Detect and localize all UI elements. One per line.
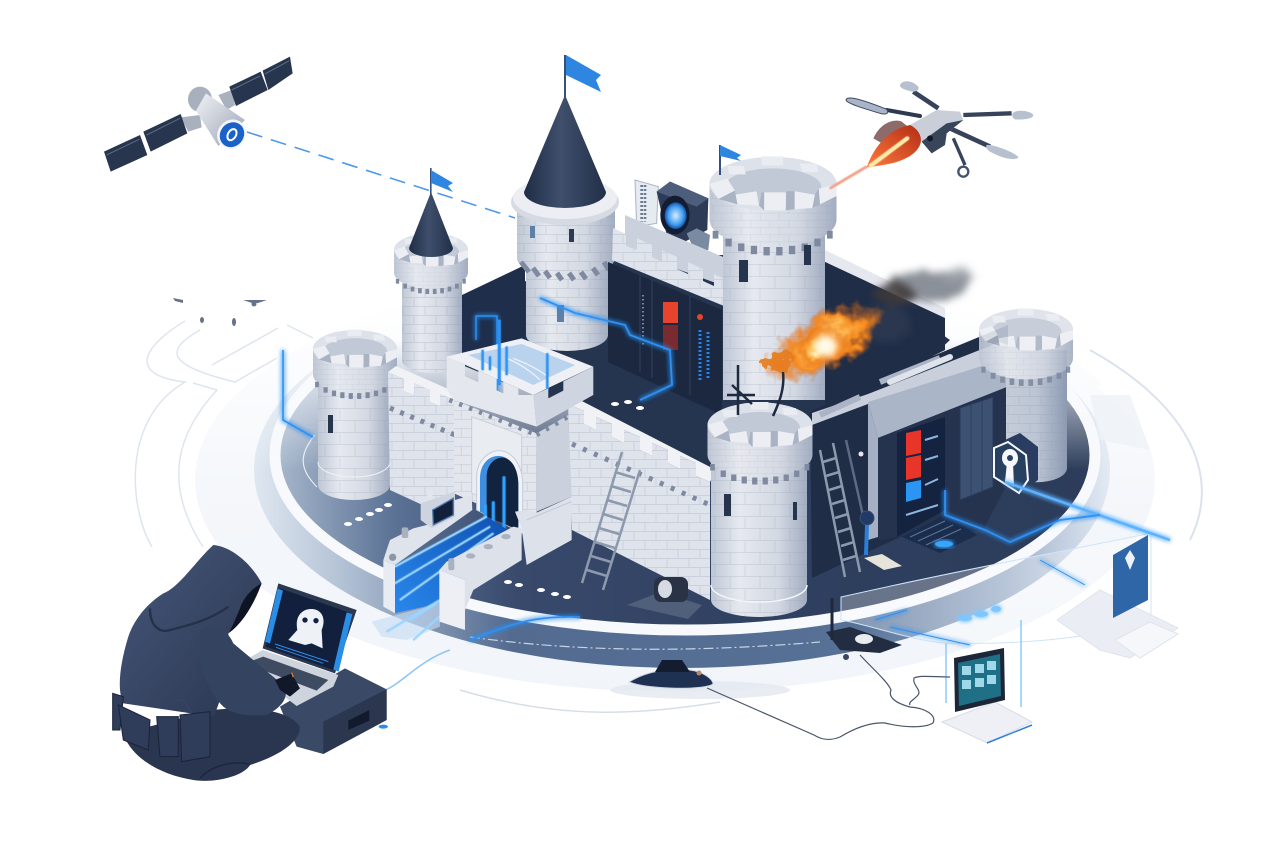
- gatehouse: [447, 320, 593, 565]
- hooded hacker at laptop: [113, 545, 388, 781]
- gate arch: [477, 451, 523, 533]
- keyboard: [902, 515, 977, 553]
- left inner wall with blue circuit: [462, 265, 525, 395]
- castle interior courtyard: [450, 255, 950, 480]
- gate plinth: [515, 497, 572, 565]
- tablet on stand: [942, 620, 1032, 743]
- tower: small cone tower back left: [394, 168, 468, 373]
- courtyard dashes: [611, 345, 904, 410]
- ladder: [820, 443, 860, 577]
- satellite: [104, 57, 293, 172]
- pale data wire near hacker: [385, 650, 450, 690]
- glass access terminal right: [1057, 395, 1178, 658]
- sentry camera module on wall: [635, 180, 710, 252]
- door: [960, 397, 993, 500]
- left ladder: [582, 452, 640, 590]
- belt pouches: [113, 693, 210, 762]
- rooftop antennas: [727, 365, 783, 416]
- laptop: [240, 650, 338, 706]
- siege box on ground: [627, 577, 702, 619]
- parapet floor: [447, 338, 593, 395]
- equipment case: [280, 668, 387, 754]
- right wall and dark alcove: [810, 325, 1008, 578]
- flag: [431, 170, 453, 192]
- tower: far right: [979, 308, 1073, 482]
- ghost icon: [288, 609, 324, 648]
- glass overlay on right ring: [841, 533, 1151, 643]
- gloved hand: [275, 673, 300, 697]
- legs: [123, 708, 300, 781]
- front curtain wall: [568, 398, 716, 600]
- tower: front: [708, 365, 812, 617]
- tower: right tall tower: [710, 145, 836, 400]
- fireball explosion: [753, 285, 897, 399]
- blue beacon beams: [483, 320, 547, 390]
- flag: [720, 145, 741, 161]
- tower: front left: [313, 330, 397, 500]
- keyhole shield icon: [994, 433, 1038, 493]
- left curtain wall: [388, 366, 462, 520]
- hood opening: [228, 583, 262, 633]
- laser beam: [830, 167, 867, 188]
- grappling tool: [846, 440, 864, 520]
- faint outer ground rings: [135, 268, 1202, 712]
- tower: tall cone tower: [511, 55, 619, 351]
- flag: [566, 55, 601, 92]
- drawbridge with blue data streams: [372, 489, 522, 640]
- ground dashes: [344, 503, 571, 599]
- blue network lines: [283, 298, 1170, 645]
- distant aerial specks: [173, 298, 267, 326]
- gate terminal monitor: [421, 492, 455, 528]
- dashed satellite signal: [247, 132, 515, 218]
- body and hood: [120, 545, 262, 717]
- arm: [199, 626, 286, 716]
- illustration: isometric castle under cyber attack: [104, 55, 1203, 781]
- left bridge wall: [383, 495, 472, 565]
- connecting wires: [707, 655, 950, 739]
- iron-shaped sensor device: [610, 660, 790, 699]
- drone: [830, 81, 1033, 188]
- central server wall: [608, 262, 722, 415]
- circular ground platform: [254, 345, 1110, 668]
- right bridge wall: [439, 527, 522, 610]
- crenellated back wall: [612, 215, 735, 306]
- control panel screen: [897, 417, 945, 537]
- ground device with antenna: [826, 598, 902, 660]
- back right wall: [825, 250, 945, 410]
- glowing floor light: [958, 606, 1001, 621]
- smoke: [854, 268, 973, 343]
